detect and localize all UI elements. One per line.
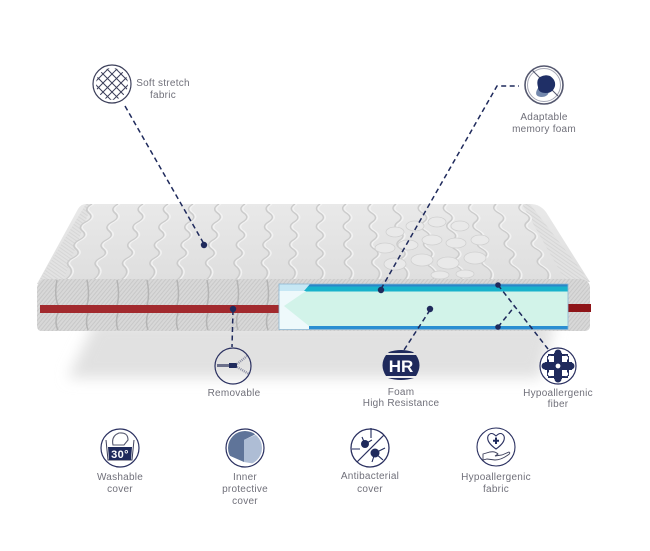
memory foam bubble texture <box>375 217 489 279</box>
icon: removable zipper <box>215 348 251 384</box>
label: soft stretch fabric: Soft stretch <box>136 78 190 89</box>
label: washable cover: Washable <box>97 472 143 483</box>
callout line: memory foam <box>378 86 519 293</box>
callout line: removable <box>230 306 236 347</box>
icon: hypoallergenic fiber <box>540 348 576 384</box>
label: hypoallergenic fabric: fabric <box>483 484 509 495</box>
icon: adaptable memory foam <box>525 66 563 104</box>
icon: HR foam: HR <box>389 357 413 376</box>
cut-away foam layers <box>279 284 568 330</box>
label: adaptable memory foam: memory foam <box>512 124 576 135</box>
label: hypoallergenic fabric: Hypoallergenic <box>461 472 531 483</box>
icon: washable cover <box>101 429 139 467</box>
label: removable: Removable <box>208 388 261 399</box>
label: inner protective cover: cover <box>232 496 258 507</box>
floor shadow <box>68 322 555 378</box>
label: hypoallergenic fiber: fiber <box>548 399 569 410</box>
icon: antibacterial cover <box>351 428 389 467</box>
label: inner protective cover: protective <box>222 484 268 495</box>
icon: soft stretch fabric <box>92 65 132 104</box>
callout line: HR foam <box>404 306 433 350</box>
mattress top surface <box>37 204 590 284</box>
mattress <box>37 204 591 331</box>
icon: hypoallergenic fabric <box>477 428 515 466</box>
label: antibacterial cover: Antibacterial <box>341 471 399 482</box>
callout line: soft stretch fabric <box>125 106 207 248</box>
icon: inner protective cover <box>226 429 264 467</box>
callout line: hypoallergenic fiber <box>495 282 548 349</box>
mattress front face <box>37 279 590 331</box>
icon: washable cover: 30° <box>111 449 129 461</box>
label: adaptable memory foam: Adaptable <box>520 112 568 123</box>
label: soft stretch fabric: fabric <box>150 90 176 101</box>
label: washable cover: cover <box>107 484 133 495</box>
icon: HR foam <box>382 350 420 380</box>
label: foam high resistance: High Resistance <box>363 398 439 409</box>
label: foam high resistance: Foam <box>388 387 414 398</box>
label: antibacterial cover: cover <box>357 484 383 495</box>
label: inner protective cover: Inner <box>233 472 257 483</box>
red piping band <box>40 304 591 313</box>
label: hypoallergenic fiber: Hypoallergenic <box>523 388 593 399</box>
